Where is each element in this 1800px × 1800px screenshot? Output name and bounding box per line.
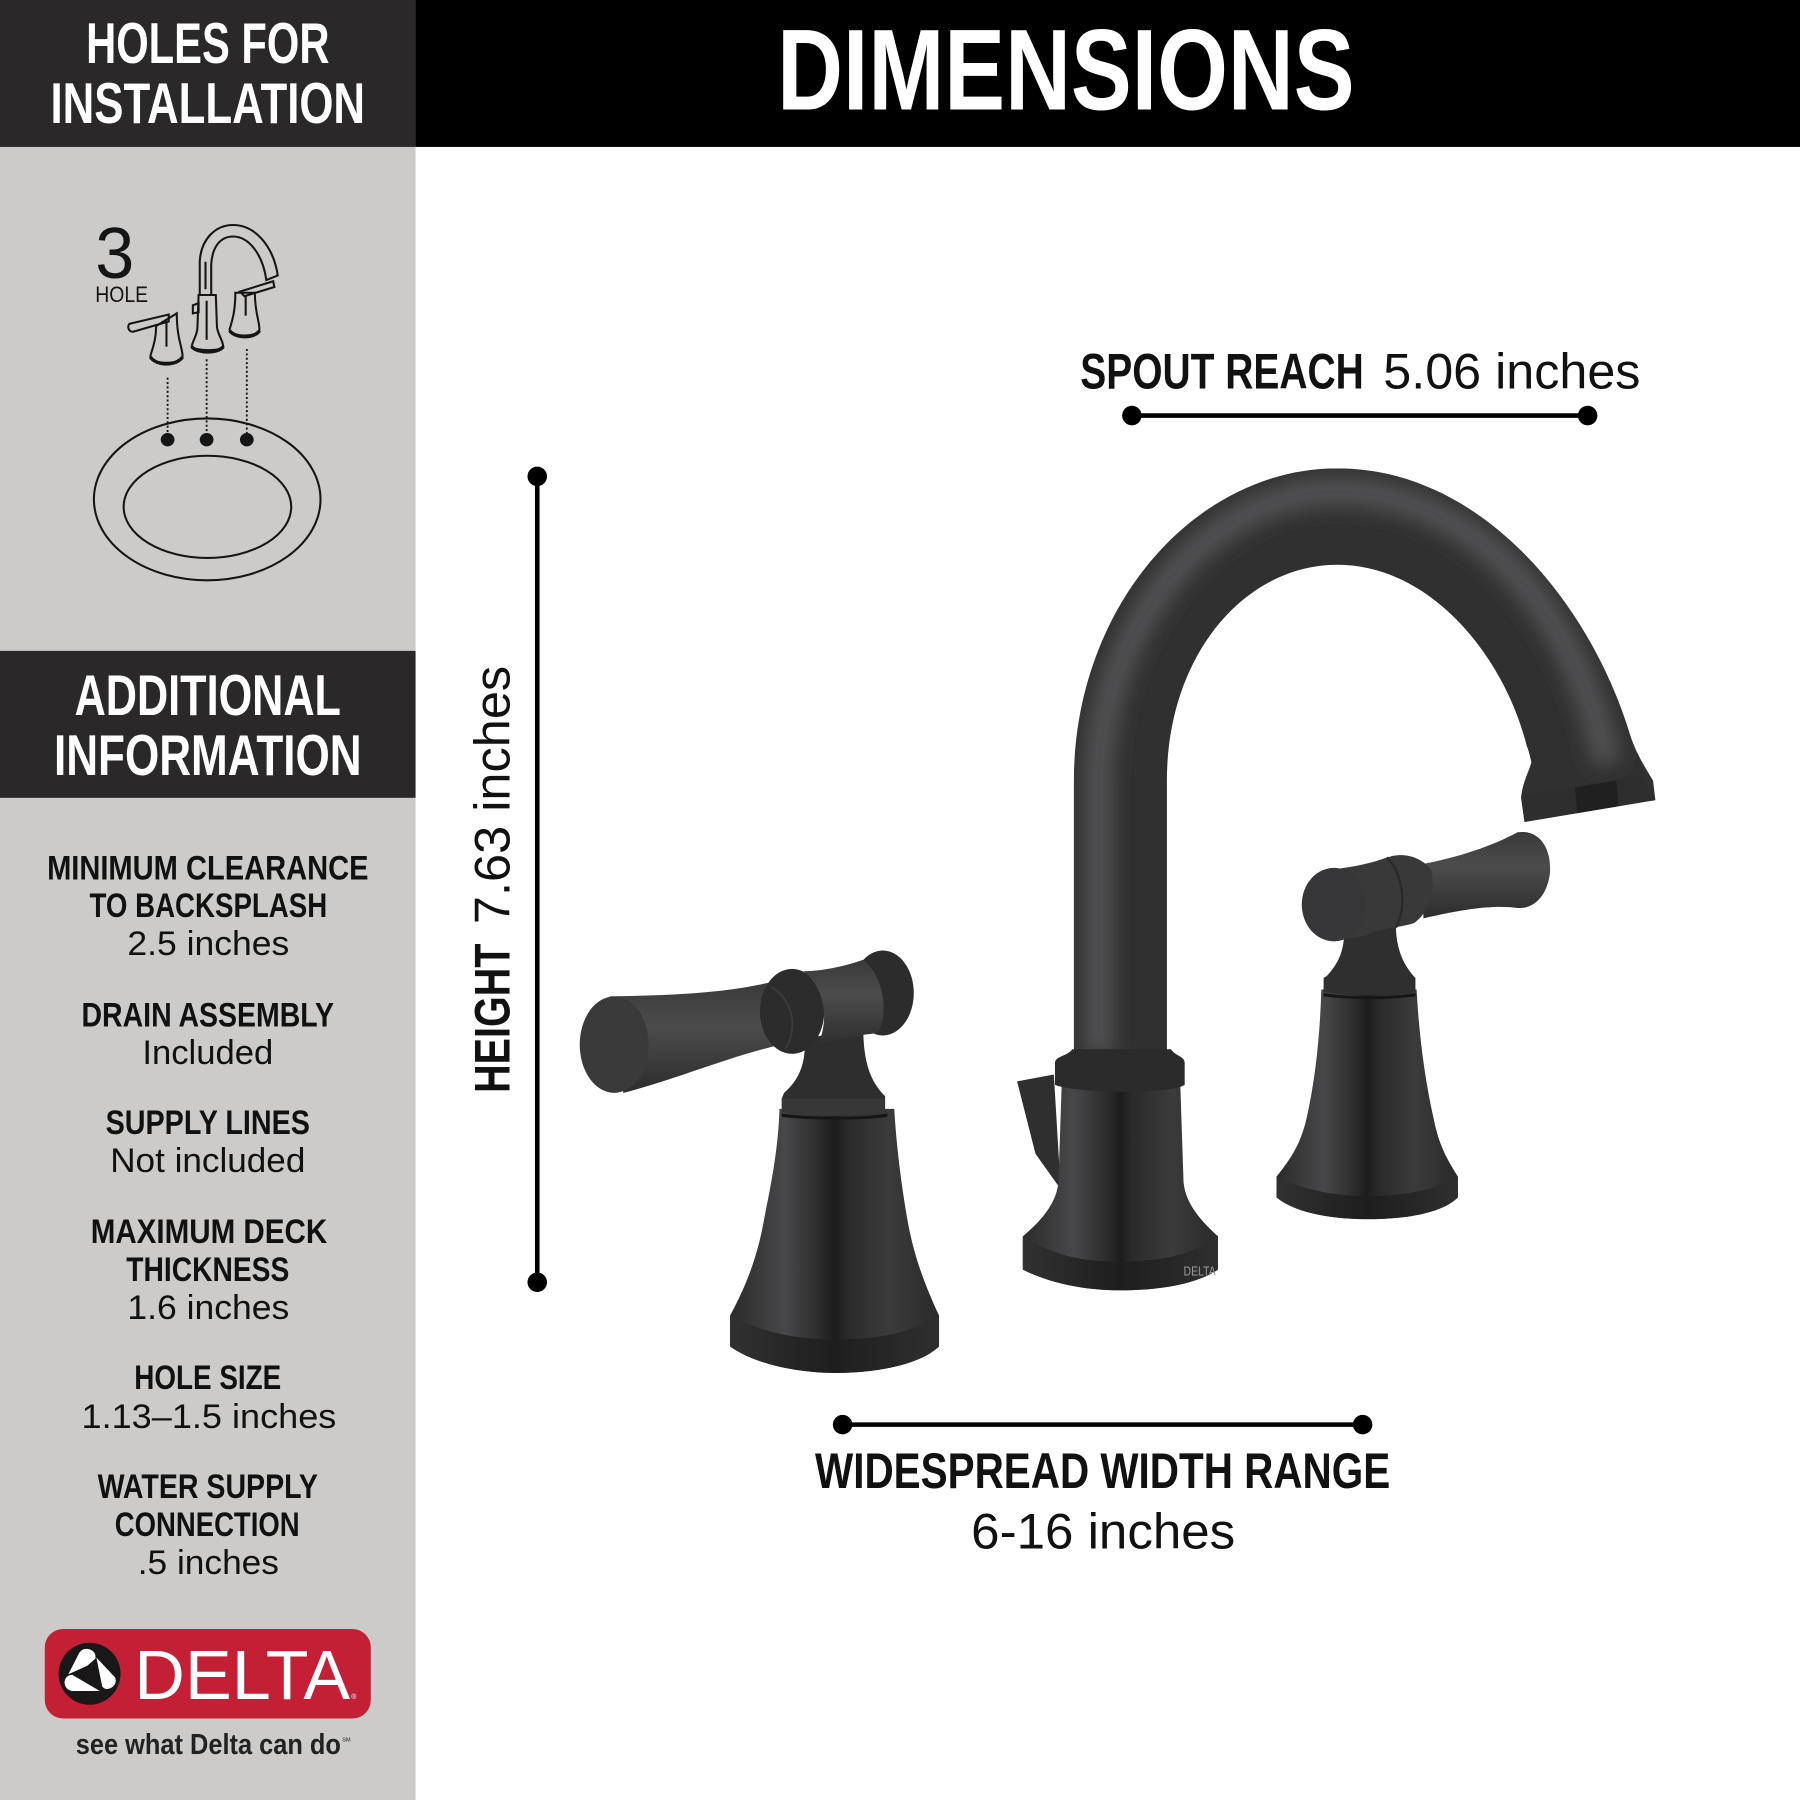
dimension: widespread width range: 6-16 inches	[971, 1503, 1235, 1560]
spec: maximum deck thickness: 1.6 inches	[127, 1289, 289, 1327]
spout	[1062, 459, 1670, 1062]
heading: additional information: INFORMATION	[54, 724, 362, 788]
label: 3 hole	[95, 214, 148, 307]
label: 3 hole: 3	[95, 214, 134, 294]
icon: sink basin	[94, 418, 321, 580]
title: dimensions	[416, 0, 1800, 147]
heading: additional information: ADDITIONAL	[75, 664, 341, 728]
spec: hole size	[82, 1359, 336, 1436]
heading: holes for installation	[0, 0, 416, 147]
icon: small right handle	[230, 281, 274, 337]
heading: additional information	[0, 651, 416, 798]
heading: holes for installation: INSTALLATION	[51, 72, 365, 136]
spec: water supply connection: WATER SUPPLY	[98, 1468, 318, 1506]
dimension: spout reach: 5.06 inches	[1383, 343, 1640, 400]
right handle	[1277, 832, 1550, 1219]
dimension: spout reach	[1080, 343, 1640, 425]
spec: water supply connection	[98, 1468, 318, 1582]
dimension: height: 7.63 inches	[464, 666, 521, 924]
logo: delta: SM	[342, 1737, 351, 1743]
dimension: height: HEIGHT	[464, 944, 521, 1093]
dimension: height	[464, 467, 547, 1292]
icon: 3 hole sink diagram	[94, 214, 321, 580]
spec: maximum deck thickness: MAXIMUM DECK	[91, 1213, 327, 1251]
dimension: widespread width range	[815, 1415, 1390, 1560]
text block: additional information list	[47, 849, 368, 1582]
spec: minimum clearance: 2.5 inches	[127, 925, 289, 963]
base engraving: DELTA	[1184, 1264, 1216, 1278]
logo: delta: DELTA	[134, 1636, 350, 1714]
spec: supply lines: SUPPLY LINES	[106, 1104, 310, 1142]
title: dimensions: DIMENSIONS	[777, 7, 1355, 135]
left handle	[580, 951, 939, 1373]
illustration: faucet	[580, 459, 1670, 1373]
center body and collar	[1017, 1049, 1218, 1290]
tagline: see what Delta can do	[76, 1729, 341, 1761]
label: 3 hole: HOLE	[95, 282, 148, 307]
spec: minimum clearance	[47, 849, 368, 963]
spec: drain assembly: Included	[142, 1034, 273, 1072]
icon: small center spout	[192, 225, 278, 352]
panel: left sidebar	[0, 147, 416, 1800]
spec: water supply connection: .5 inches	[138, 1544, 279, 1582]
spec: supply lines: Not included	[110, 1142, 305, 1180]
dimension: widespread width range: WIDESPREAD WIDTH RANGE	[815, 1442, 1390, 1499]
spec: maximum deck thickness	[91, 1213, 327, 1327]
spec: water supply connection: CONNECTION	[115, 1506, 300, 1544]
dotted guides	[168, 349, 247, 434]
logo: delta: ®	[351, 1693, 356, 1701]
logo: delta	[45, 1629, 371, 1761]
spec: drain assembly: DRAIN ASSEMBLY	[82, 996, 334, 1034]
spec: supply lines	[106, 1104, 310, 1180]
spec: hole size: 1.13–1.5 inches	[82, 1398, 336, 1436]
spec: maximum deck thickness: THICKNESS	[126, 1251, 289, 1289]
heading: holes for installation: HOLES FOR	[86, 12, 329, 76]
spec: hole size: HOLE SIZE	[134, 1359, 281, 1397]
spec: drain assembly	[82, 996, 334, 1072]
icon: small left handle	[128, 313, 183, 364]
spec: minimum clearance: TO BACKSPLASH	[90, 887, 327, 925]
dimension: spout reach: SPOUT REACH	[1080, 343, 1364, 400]
icon: delta triangle mark	[59, 1643, 121, 1705]
spec: minimum clearance: MINIMUM CLEARANCE	[47, 849, 368, 887]
